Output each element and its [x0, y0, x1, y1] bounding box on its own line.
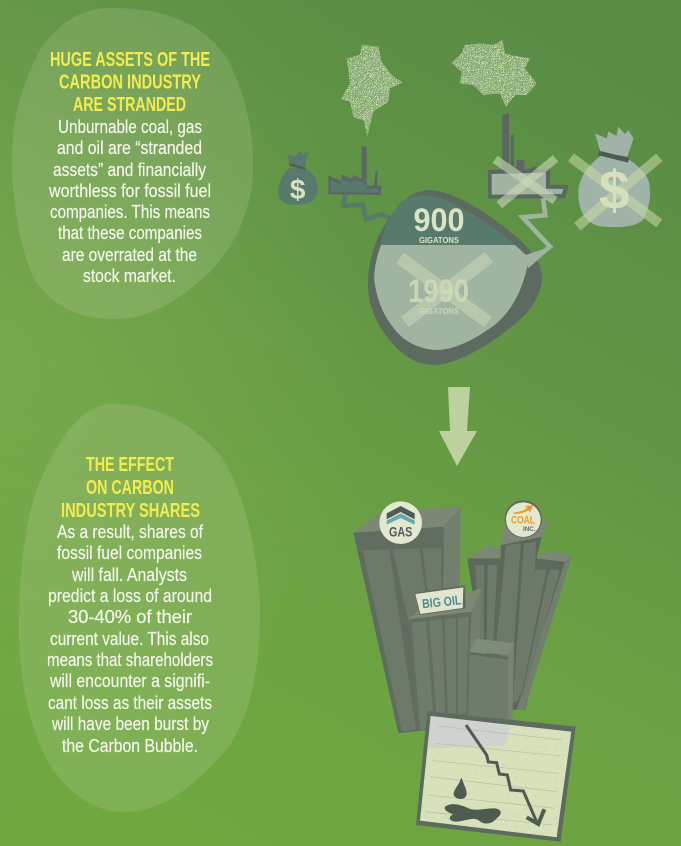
logo: gas [379, 501, 422, 544]
logo: gas: GAS [389, 525, 412, 540]
text block: effect explanation: fossil fuel companies [57, 542, 202, 563]
sign: big oil: BIG OIL [421, 592, 462, 611]
cross over 1990 [400, 257, 489, 322]
cross over bag [571, 157, 659, 227]
icon: money bag large crossed: $ [599, 159, 630, 221]
text block: effect explanation: will fall. Analysts [71, 564, 187, 585]
icon: smoke cloud left [341, 45, 403, 137]
heading: effect on carbon industry shares: THE EFFECT [86, 454, 174, 476]
text block: effect explanation: the Carbon Bubble. [62, 735, 198, 756]
text block: stranded assets explanation [48, 116, 211, 286]
label: 900: 900 [414, 202, 464, 238]
text block: stranded assets explanation: worthless for fossil fuel [48, 180, 211, 201]
heading: effect on carbon industry shares: ON CARBON [86, 477, 174, 499]
sign: big oil [415, 585, 466, 615]
pipe: factory to carbon bubble [343, 194, 393, 219]
panel: stranded assets text bubble [12, 8, 253, 319]
panel: effect on shares text bubble [19, 404, 260, 812]
trend line arrow [466, 725, 544, 824]
text block: stranded assets explanation: are overrated at the [62, 244, 197, 265]
building: coal tower complex [467, 520, 572, 710]
text block: stranded assets explanation: Unburnable coal, gas [58, 116, 202, 137]
heading: huge assets: ARE STRANDED [73, 94, 186, 116]
chart: falling share price [416, 711, 576, 842]
text block: stranded assets explanation: assets” and financially [53, 159, 207, 180]
logo: coal inc: INC. [523, 526, 536, 533]
heading: effect on carbon industry shares: INDUSTRY SHARES [61, 500, 200, 522]
text block: effect explanation [47, 521, 213, 756]
logo: coal inc: COAL [511, 514, 535, 526]
icon: oil rig [488, 113, 569, 198]
icon: money bag small [278, 151, 318, 205]
heading: huge assets [50, 49, 210, 116]
icon: oil drop [454, 777, 467, 799]
icon: smoke cloud right [452, 40, 537, 107]
label: 1990: 1990 [408, 273, 469, 309]
text block: stranded assets explanation: that these companies [58, 222, 202, 243]
pipe: rig to carbon bubble [523, 195, 553, 268]
heading: effect on carbon industry shares [61, 454, 200, 522]
text block: effect explanation: means that shareholders [47, 649, 213, 670]
heading: huge assets: HUGE ASSETS OF THE [50, 49, 210, 71]
building: front block [468, 638, 514, 720]
text block: stranded assets explanation: stock market. [83, 265, 176, 286]
reserve: burnable 900 gigatons [381, 195, 515, 245]
building: big oil tower [408, 588, 482, 732]
text block: effect explanation: current value. This also [50, 628, 209, 649]
icon: money bag large crossed [571, 127, 659, 227]
cross over rig [495, 158, 556, 205]
text block: effect explanation: predict a loss of around [48, 585, 212, 606]
text block: effect explanation: cant loss as their assets [48, 692, 212, 713]
building: gas tower [353, 507, 461, 733]
text block: effect explanation: 30-40% of their [68, 606, 192, 627]
label: gigatons crossed: GIGATONS [419, 306, 459, 316]
icon: money bag small: $ [290, 174, 306, 205]
skyscrapers [353, 500, 572, 733]
heading: huge assets: CARBON INDUSTRY [59, 72, 201, 94]
text block: effect explanation: As a result, shares of [57, 521, 204, 542]
icon: coal factory [328, 146, 381, 195]
text block: stranded assets explanation: companies. This means [50, 201, 210, 222]
label: gigatons: GIGATONS [419, 235, 459, 245]
icon: oil spill [445, 804, 501, 824]
arrow down [439, 387, 477, 466]
text block: effect explanation: will encounter a signifi- [49, 670, 210, 691]
text block: effect explanation: will have been burst by [51, 713, 210, 734]
logo: coal inc [505, 500, 542, 538]
reserve: unburnable 1990 gigatons [374, 245, 528, 350]
text block: stranded assets explanation: and oil are “stranded [57, 137, 202, 158]
carbon bubble [368, 190, 542, 365]
